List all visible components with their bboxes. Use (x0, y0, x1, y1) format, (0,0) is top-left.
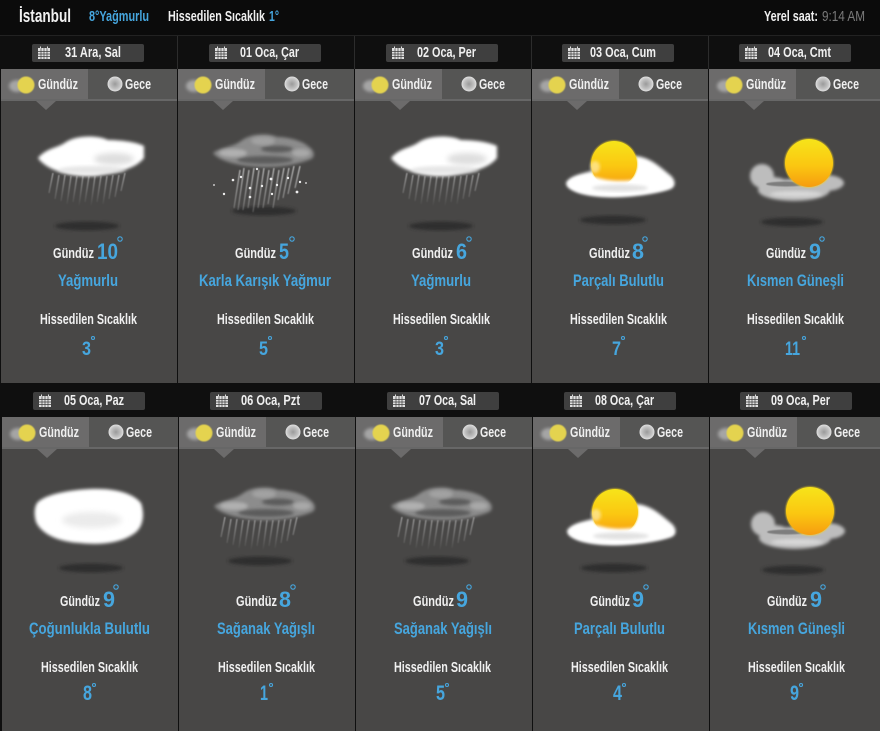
day card: 02 Oca (355, 44, 531, 360)
feels-like temperature: Hissedilen Sıcaklık (168, 8, 265, 25)
date pill: 06 Oca, Pzt (241, 393, 300, 409)
date pill: 01 Oca, Çar (240, 45, 299, 61)
daytime temperature: 9 (809, 239, 821, 264)
daytime temperature: Gündüz (235, 246, 276, 262)
column dividers in the date strip (177, 36, 709, 69)
day card: 06 Oca (179, 392, 355, 705)
day/night tabs: Gündüz (39, 425, 79, 441)
icon: showers (391, 487, 492, 566)
daytime temperature (589, 237, 647, 264)
day/night tabs: Gece (657, 425, 683, 441)
day/night tabs (1, 69, 177, 110)
feels-like value: 5 (436, 682, 445, 705)
condition: Sağanak Yağışlı (217, 619, 315, 638)
date pill: 09 Oca, Per (771, 393, 830, 409)
top header bar (0, 0, 880, 36)
daytime temperature (235, 237, 294, 264)
day/night tabs (178, 69, 354, 110)
date pill (386, 44, 498, 62)
feels-like value: 1 (260, 682, 268, 705)
icon: partly cloudy (566, 140, 675, 224)
feels-like label: Hissedilen Sıcaklık (571, 660, 669, 676)
daytime temperature: 10 (97, 239, 118, 264)
date pill: 31 Ara, Sal (65, 45, 121, 61)
date pill: 04 Oca, Cmt (768, 45, 831, 61)
feels-like value: 9 (790, 682, 799, 705)
day/night tabs (355, 69, 531, 110)
feels-like value: 4 (613, 682, 622, 705)
day/night tabs: Gündüz (747, 425, 787, 441)
feels-like label: Hissedilen Sıcaklık (394, 660, 492, 676)
daytime temperature (412, 237, 471, 264)
feels-like label: Hissedilen Sıcaklık (747, 312, 845, 328)
daytime temperature: Gündüz (766, 246, 806, 262)
date pill: 05 Oca, Paz (64, 393, 124, 409)
icon: mostly sunny (751, 486, 845, 574)
daytime temperature: 9 (810, 587, 822, 612)
feels-like label: Hissedilen Sıcaklık (41, 660, 139, 676)
condition: Yağmurlu (58, 271, 118, 290)
daytime temperature: 9 (103, 587, 115, 612)
day/night tabs (2, 417, 178, 458)
feels-like label: Hissedilen Sıcaklık (393, 312, 491, 328)
date pill (32, 44, 144, 62)
day/night tabs: Gece (833, 77, 859, 93)
date pill: 07 Oca, Sal (419, 393, 476, 409)
feels-like value: 3 (435, 339, 444, 360)
date pill: 02 Oca, Per (417, 45, 476, 61)
day/night tabs (532, 69, 708, 110)
icon: mostly cloudy (35, 489, 143, 572)
feels-like value: 8 (83, 682, 92, 705)
date pill: 03 Oca, Cum (590, 45, 656, 61)
condition: Kısmen Güneşli (747, 271, 844, 290)
day/night tabs: Gece (126, 425, 152, 441)
city name: İstanbul (19, 6, 71, 26)
day card: 04 Oca (709, 44, 880, 360)
date pill (209, 44, 321, 62)
daytime temperature: Gündüz (53, 246, 94, 262)
date pill (740, 392, 852, 410)
daytime temperature: 8 (632, 239, 644, 264)
condition: Kısmen Güneşli (748, 619, 845, 638)
daytime temperature: Gündüz (589, 246, 630, 262)
local time value: 9:14 AM (822, 8, 865, 25)
daytime temperature (590, 585, 648, 612)
date pill (739, 44, 851, 62)
day/night tabs: Gündüz (569, 77, 609, 93)
date pill (562, 44, 674, 62)
icon: rain cloud (38, 136, 144, 230)
daytime temperature: Gündüz (236, 594, 277, 610)
condition: Parçalı Bulutlu (573, 271, 664, 290)
daytime temperature: 6 (456, 239, 467, 264)
day/night tabs: Gündüz (392, 77, 432, 93)
day/night tabs (709, 69, 880, 110)
day/night tabs: Gündüz (38, 77, 78, 93)
day card: 03 Oca (532, 44, 708, 360)
day/night tabs: Gece (834, 425, 860, 441)
feels-like label: Hissedilen Sıcaklık (40, 312, 138, 328)
daytime temperature (766, 237, 824, 264)
current condition: 8°Yağmurlu (89, 8, 149, 25)
day/night tabs (710, 417, 880, 458)
day/night tabs: Gece (480, 425, 506, 441)
daytime temperature (413, 585, 471, 612)
daytime temperature: 8 (279, 587, 291, 612)
icon: mostly sunny (750, 138, 844, 226)
day/night tabs: Gündüz (393, 425, 433, 441)
day/night tabs: Gece (656, 77, 682, 93)
feels-like label: Hissedilen Sıcaklık (570, 312, 668, 328)
daytime temperature: Gündüz (412, 246, 453, 262)
daytime temperature: 9 (456, 587, 468, 612)
day/night tabs: Gündüz (216, 425, 256, 441)
day/night tabs: Gece (302, 77, 328, 93)
date pill (564, 392, 676, 410)
day/night tabs: Gece (303, 425, 329, 441)
daytime temperature (767, 585, 825, 612)
daytime temperature: 5 (279, 239, 289, 264)
day/night tabs (356, 417, 532, 458)
condition: Çoğunlukla Bulutlu (29, 619, 150, 638)
icon: showers (214, 487, 315, 566)
local time label: Yerel saat: (764, 8, 818, 25)
icon: partly cloudy (567, 488, 676, 572)
day card: 09 Oca (710, 392, 880, 705)
daytime temperature: Gündüz (413, 594, 454, 610)
date pill (387, 392, 499, 410)
icon: rain cloud (391, 136, 497, 230)
day card: 31 Ara (1, 44, 177, 360)
day/night tabs: Gece (479, 77, 505, 93)
feels-like value: 1° (269, 8, 279, 25)
day/night tabs: Gündüz (215, 77, 255, 93)
day/night tabs: Gündüz (570, 425, 610, 441)
daytime temperature: Gündüz (60, 594, 100, 610)
day card: 08 Oca (533, 392, 709, 705)
daytime temperature (60, 585, 118, 612)
icon: sleet cloud (213, 134, 314, 216)
day card: 05 Oca (2, 392, 178, 705)
daytime temperature: Gündüz (767, 594, 807, 610)
feels-like label: Hissedilen Sıcaklık (748, 660, 846, 676)
daytime temperature (53, 237, 122, 264)
feels-like label: Hissedilen Sıcaklık (218, 660, 316, 676)
condition: Sağanak Yağışlı (394, 619, 492, 638)
day/night tabs (179, 417, 355, 458)
day card: 01 Oca (178, 44, 354, 360)
panel backgrounds, row 2 (2, 448, 880, 731)
feels-like value: 11 (785, 339, 800, 360)
date pill: 08 Oca, Çar (595, 393, 654, 409)
date pill (33, 392, 145, 410)
feels-like value: 3 (82, 339, 91, 360)
condition: Parçalı Bulutlu (574, 619, 665, 638)
day/night tabs: Gündüz (746, 77, 786, 93)
daytime temperature (236, 585, 295, 612)
day card: 07 Oca (356, 392, 532, 705)
daytime temperature: 9 (632, 587, 644, 612)
panel backgrounds, row 1 (1, 100, 880, 383)
date pill (210, 392, 322, 410)
feels-like label: Hissedilen Sıcaklık (217, 312, 315, 328)
day/night tabs (533, 417, 709, 458)
condition: Karla Karışık Yağmur (199, 271, 331, 290)
condition: Yağmurlu (411, 271, 471, 290)
feels-like value: 7 (612, 339, 621, 360)
feels-like value: 5 (259, 339, 268, 360)
day/night tabs: Gece (125, 77, 151, 93)
daytime temperature: Gündüz (590, 594, 630, 610)
